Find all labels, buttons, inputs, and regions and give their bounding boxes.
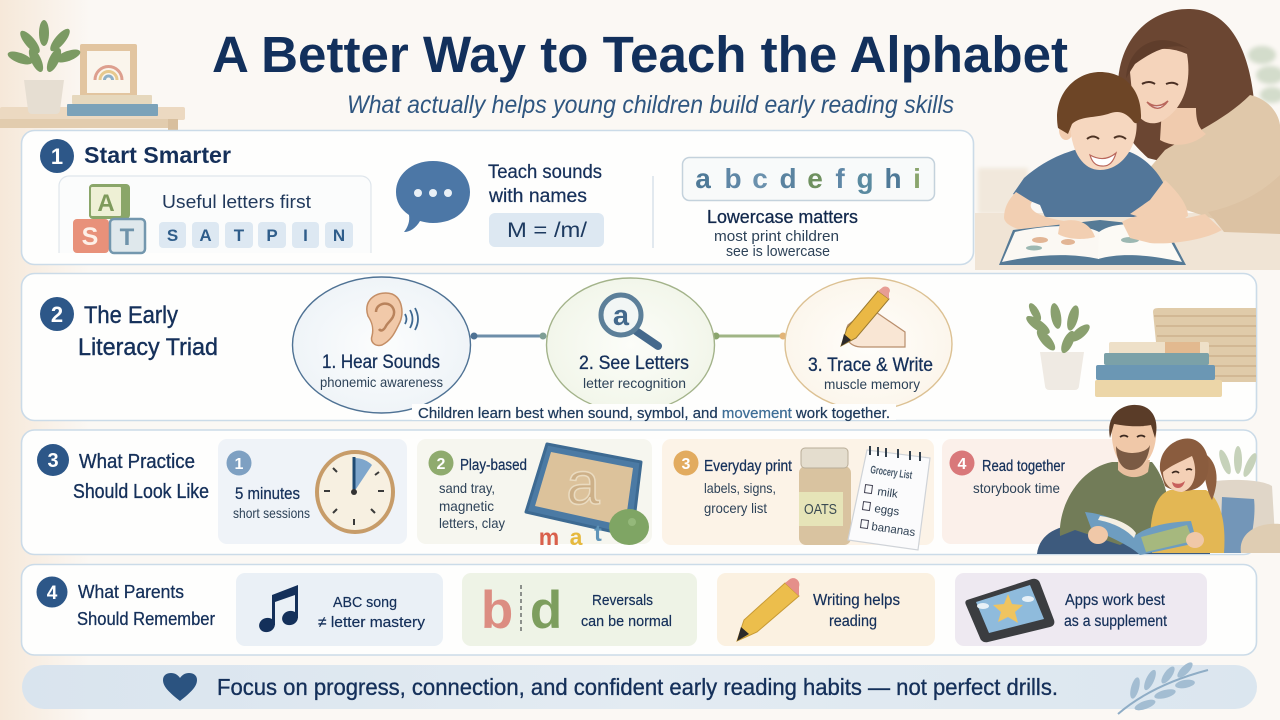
text: teach sounds with names: Teach sounds [488, 162, 602, 183]
text: labels, signs, [704, 480, 776, 496]
picture frame [80, 44, 137, 100]
decor: book stack [1095, 342, 1222, 397]
circle: hear sounds [292, 277, 470, 413]
text: Writing helps [813, 592, 900, 609]
heading: What Practice [79, 450, 195, 473]
text [1064, 592, 1168, 630]
letter blocks: T [120, 224, 135, 251]
heading [77, 581, 215, 629]
open book [999, 220, 1186, 265]
sofa [1208, 480, 1276, 553]
heading: Start Smarter: Start Smarter [84, 142, 231, 168]
text [704, 458, 793, 516]
lowercase alphabet strip: g [856, 163, 874, 194]
heading: What Parents [78, 581, 184, 602]
icon: b and d: d [530, 581, 562, 640]
lowercase alphabet strip: i [913, 163, 921, 194]
formula chip M = /m/: M = /m/ [507, 219, 587, 242]
text: Read together [982, 458, 1065, 475]
card: ABC song [236, 573, 443, 646]
card: 5 minutes [218, 439, 407, 544]
text: Everyday print [704, 458, 793, 475]
icon: clock [317, 452, 393, 532]
text: magnetic [439, 498, 494, 514]
list heading: Grocery List [870, 464, 913, 482]
letter tiles SATPIN: A [199, 226, 212, 245]
items [860, 485, 916, 539]
icon: b and d: b [481, 581, 513, 640]
mother [1118, 9, 1280, 234]
text [233, 485, 310, 521]
badge 4: 4 [47, 583, 58, 604]
text [318, 594, 426, 631]
text [973, 458, 1065, 496]
formula chip M = /m/ [489, 213, 604, 247]
icon: magnifier: a [613, 300, 630, 332]
icon: magnetic letters: m [539, 524, 559, 550]
lowercase alphabet strip [682, 158, 934, 200]
card: everyday print [662, 439, 934, 550]
text: Apps work best [1065, 592, 1166, 609]
badge 2 [40, 297, 74, 331]
text: reading [829, 613, 877, 630]
subtitle: What actually helps young children build early reading skills [347, 91, 954, 119]
shelf with plant, frame and books [0, 20, 185, 131]
decor: leaf branch [1118, 660, 1208, 714]
letter blocks: S [82, 223, 98, 251]
connector 1 to 2 [470, 332, 546, 340]
icon: hand with pencil [841, 286, 905, 347]
text: 5 minutes [235, 485, 300, 503]
icon: magnetic letters: t [594, 520, 602, 546]
illustration: father and daughter reading [1037, 405, 1280, 555]
father [1060, 405, 1168, 545]
number: 2 [437, 456, 446, 473]
lowercase alphabet strip: d [779, 163, 797, 194]
heading [73, 450, 209, 503]
number [226, 450, 252, 476]
text: grocery list [704, 500, 767, 516]
items: milk [877, 486, 899, 501]
icon: magnetic letters [539, 520, 602, 550]
hands [1088, 526, 1204, 548]
card: reversals [462, 573, 697, 646]
badge 3: 3 [47, 450, 59, 472]
decor: potted plant [1024, 301, 1092, 390]
badge 4 [36, 576, 68, 608]
text: ≠ letter mastery [318, 614, 426, 631]
icon: b and d [481, 581, 562, 640]
teddy [1241, 524, 1280, 553]
heading: The Early Literacy Triad [78, 302, 218, 361]
text: lowercase matters: see is lowercase [726, 244, 830, 260]
jar label: OATS [804, 501, 837, 518]
heading: Should Remember [77, 608, 215, 629]
badge 2: 2 [51, 302, 63, 327]
letter tiles SATPIN: I [303, 226, 308, 245]
footer text: Focus on progress, connection, and confident early reading habits — not perfect drills. [217, 674, 1058, 700]
illustration: mother and boy reading [975, 9, 1280, 270]
text: Play-based [460, 457, 527, 474]
card: writing helps reading [717, 573, 935, 646]
caption: Children learn best when sound, symbol, and movement work together. [418, 405, 890, 422]
text: Reversals [592, 592, 653, 609]
panel: The Early Literacy Triad [22, 274, 1256, 422]
letter tiles SATPIN: P [266, 226, 278, 245]
number: 1 [235, 456, 244, 473]
panel: What Parents Should Remember [22, 564, 1256, 655]
footer banner [22, 660, 1257, 714]
text: lowercase matters [707, 206, 858, 260]
icon: speech bubble [396, 161, 470, 232]
letter blocks [73, 184, 145, 253]
sublabel: muscle memory [824, 376, 920, 392]
icon: pencil [737, 578, 799, 641]
text: storybook time [973, 480, 1060, 496]
daughter [1150, 439, 1224, 553]
icon: clay [609, 509, 649, 545]
books [67, 95, 158, 116]
letter tiles SATPIN: T [234, 226, 245, 245]
circle: trace and write [785, 278, 952, 410]
text: sand tray, [439, 480, 495, 496]
card: read together [942, 439, 1142, 544]
lowercase alphabet strip: e [807, 163, 823, 194]
number [674, 450, 698, 476]
lowercase alphabet strip: c [752, 163, 768, 194]
card: useful letters first [59, 176, 371, 253]
connector 2 to 3 [712, 332, 786, 340]
heading: The Early Literacy Triad: Literacy Triad [78, 334, 218, 361]
decor: basket [1153, 308, 1256, 382]
text: ABC song [333, 594, 397, 611]
text: can be normal [581, 613, 672, 630]
text: letters, clay [439, 515, 505, 531]
heading: Should Look Like [73, 480, 209, 503]
label: 1. Hear Sounds [322, 352, 440, 373]
icon: magnetic letters: a [570, 524, 583, 550]
lowercase alphabet strip: b [724, 163, 742, 194]
label: 3. Trace & Write [808, 355, 933, 376]
boy [1004, 72, 1188, 236]
text: short sessions [233, 505, 310, 521]
lowercase alphabet strip: a [695, 163, 711, 194]
circle: see letters [546, 278, 714, 412]
card: play-based [417, 439, 652, 550]
cushion [1220, 497, 1255, 553]
icon: sand tray: a [566, 450, 600, 517]
sublabel: phonemic awareness [320, 374, 443, 390]
badge 3 [37, 444, 69, 476]
number [428, 450, 454, 476]
number: 3 [682, 456, 691, 473]
text: teach sounds with names [488, 162, 602, 207]
jeans [1037, 524, 1210, 554]
text [813, 592, 900, 630]
hands [1058, 214, 1222, 243]
plant [6, 20, 82, 114]
text: as a supplement [1064, 613, 1168, 630]
icon: heart [163, 673, 197, 701]
badge 1: 1 [51, 144, 63, 169]
icon: music notes [257, 585, 300, 634]
number [950, 450, 974, 476]
plant [1217, 446, 1259, 478]
letter tiles SATPIN: S [167, 226, 178, 245]
icon: oats jar [799, 448, 851, 545]
number: 4 [958, 456, 967, 473]
lowercase alphabet strip: f [835, 163, 845, 194]
open storybook [1085, 512, 1197, 555]
label: 2. See Letters [579, 353, 689, 374]
text: lowercase matters: Lowercase matters [707, 206, 858, 227]
icon: sand tray [526, 444, 641, 536]
text: teach sounds with names: with names [488, 186, 587, 207]
icon: grocery list [848, 446, 930, 550]
lowercase alphabet strip: h [884, 163, 902, 194]
panel: Start Smarter [22, 130, 974, 264]
letter blocks: A [97, 190, 115, 217]
table [975, 213, 1280, 270]
title: A Better Way to Teach the Alphabet [212, 26, 1068, 83]
label: Useful letters first [162, 192, 311, 212]
text [439, 457, 527, 531]
icon: tablet [965, 579, 1054, 642]
items: bananas [871, 521, 916, 539]
text [581, 592, 672, 630]
letter tiles SATPIN [159, 222, 353, 248]
icon: magnifier [601, 295, 658, 346]
text: lowercase matters: most print children [714, 229, 839, 245]
sublabel: letter recognition [583, 375, 686, 391]
icon: ear [367, 293, 418, 345]
heading: The Early Literacy Triad: The Early [84, 302, 178, 329]
card: apps [955, 573, 1207, 646]
items: eggs [874, 503, 900, 518]
panel: What Practice Should Look Like [22, 430, 1256, 554]
badge 1 [40, 139, 74, 173]
letter tiles SATPIN: N [333, 226, 345, 245]
